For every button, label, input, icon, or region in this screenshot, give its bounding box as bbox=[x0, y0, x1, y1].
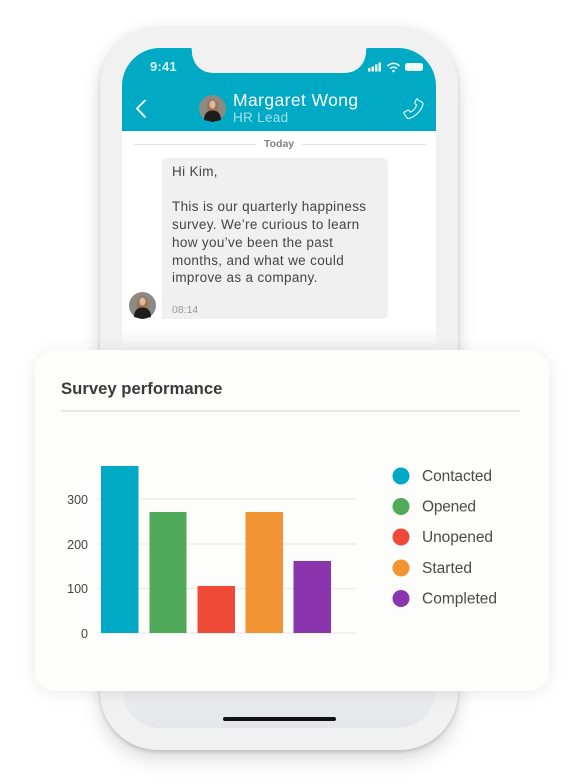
app header bbox=[122, 48, 436, 131]
bars bbox=[101, 466, 331, 633]
phone call icon bbox=[403, 98, 424, 120]
panel heading: Survey performance bbox=[61, 379, 222, 398]
message text: survey. We’re curious to learn bbox=[172, 217, 360, 232]
message text: how you’ve been the past bbox=[172, 235, 333, 250]
sender avatar bbox=[129, 292, 156, 319]
message text: This is our quarterly happiness bbox=[172, 199, 366, 214]
y axis labels: 300 bbox=[67, 493, 88, 507]
contact name: Margaret Wong bbox=[233, 90, 358, 110]
legend: Opened bbox=[422, 498, 476, 516]
y axis labels bbox=[67, 493, 88, 641]
message bubble bbox=[162, 158, 388, 319]
panel: survey performance bbox=[35, 350, 549, 691]
phone screen bbox=[122, 48, 436, 728]
header avatar bbox=[199, 95, 226, 122]
notch bbox=[191, 48, 367, 73]
chat background bbox=[122, 131, 436, 350]
message text: Hi Kim, bbox=[172, 164, 218, 179]
legend: Unopened bbox=[422, 529, 493, 546]
lower screen area bbox=[122, 338, 436, 728]
legend: Completed bbox=[422, 590, 497, 608]
y axis labels: 0 bbox=[81, 627, 88, 641]
message text: months, and what we could bbox=[172, 253, 344, 268]
today label: Today bbox=[264, 138, 294, 150]
y axis labels: 100 bbox=[67, 582, 88, 596]
status icons bbox=[368, 62, 423, 72]
legend bbox=[392, 468, 497, 608]
contact role: HR Lead bbox=[233, 110, 288, 125]
phone body bbox=[100, 27, 458, 750]
message text bbox=[172, 164, 366, 285]
legend: Started bbox=[422, 560, 472, 577]
legend: Contacted bbox=[422, 468, 492, 485]
y axis labels: 200 bbox=[67, 538, 88, 552]
back arrow bbox=[136, 99, 146, 118]
status bar time: 9:41 bbox=[150, 59, 177, 74]
bar chart bbox=[67, 466, 356, 641]
message time: 08:14 bbox=[172, 304, 198, 316]
message text: improve as a company. bbox=[172, 270, 318, 285]
home indicator bbox=[223, 717, 336, 721]
